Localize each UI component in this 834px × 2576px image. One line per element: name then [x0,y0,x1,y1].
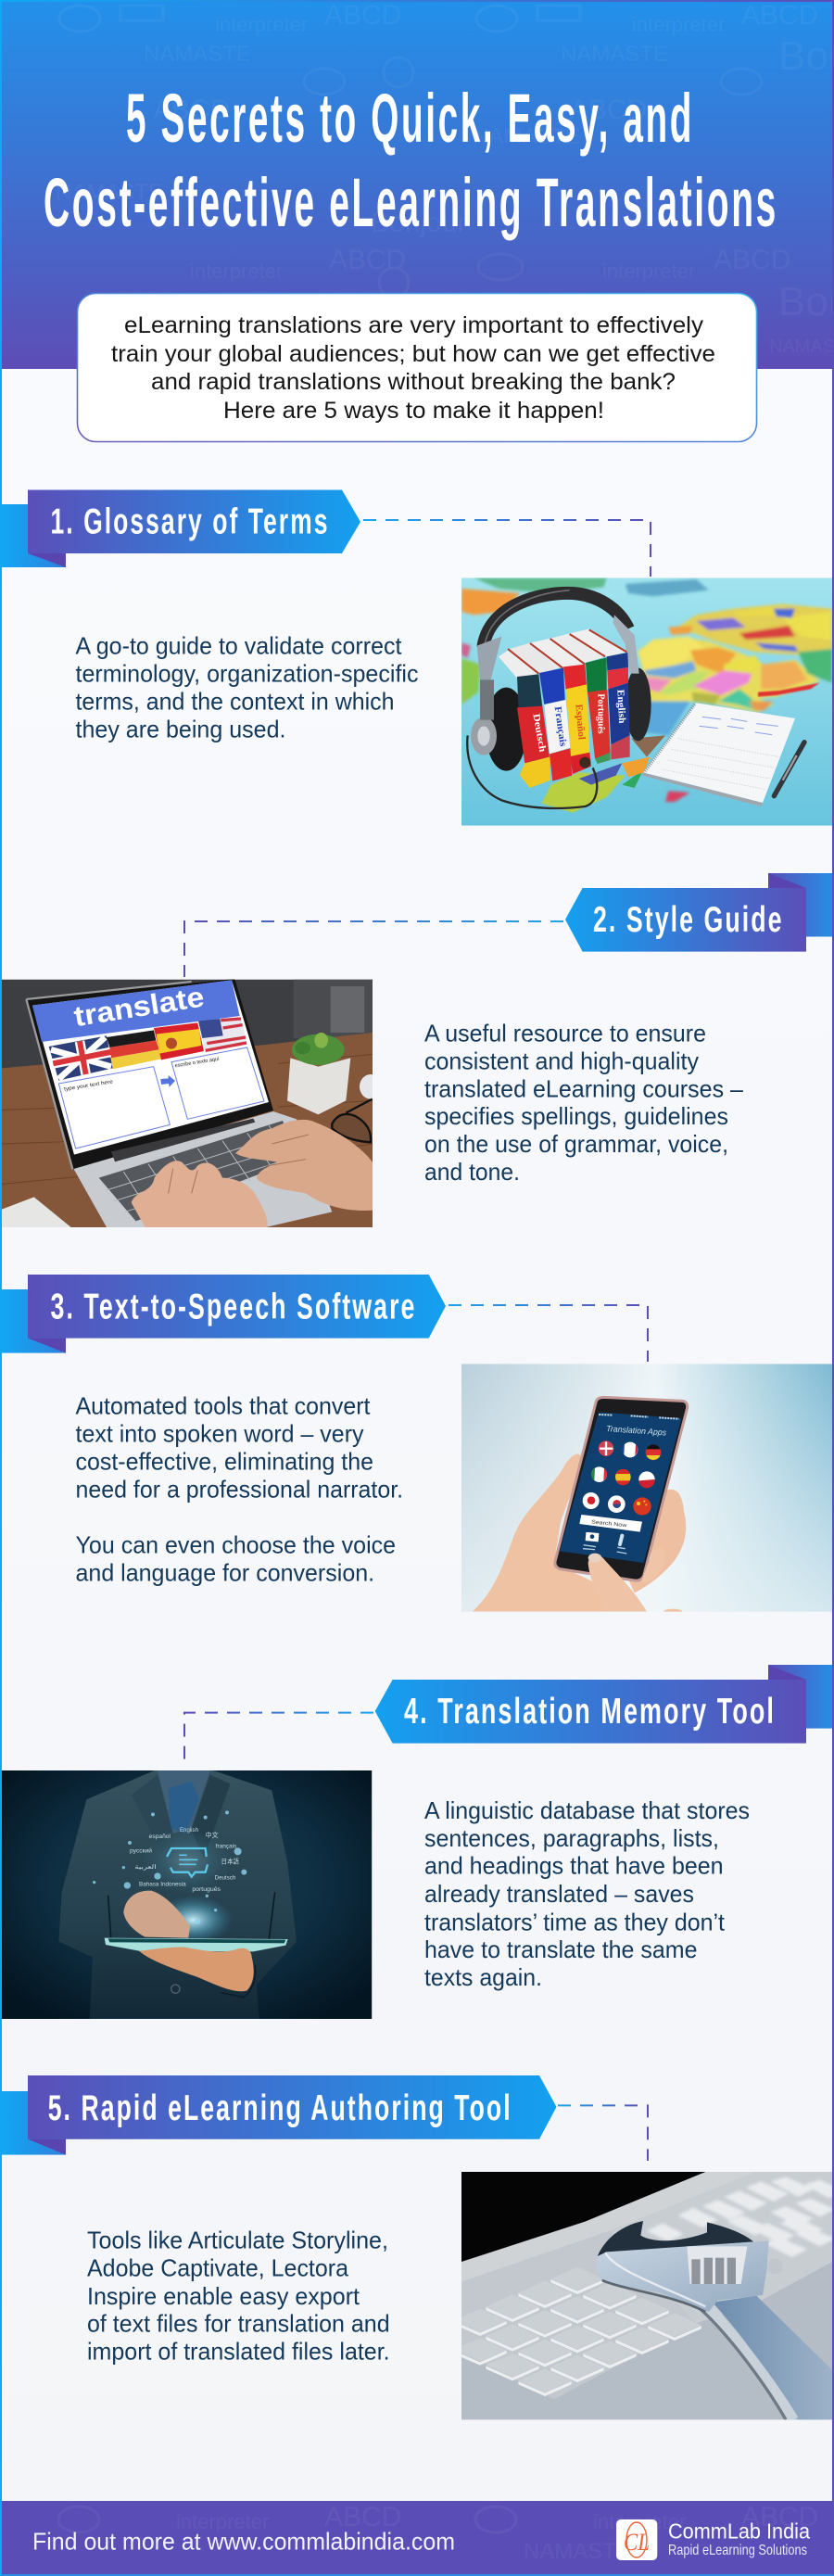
section 1 text: terms, and the context in which [76,687,395,715]
decorative language doodles: NAMASTE [524,2539,631,2564]
decorative language doodles [56,0,834,357]
section 3 image: hand holding phone: Translation Apps [606,1424,667,1438]
flag buttons [599,1440,613,1456]
section 3 text: text into spoken word – very [76,1420,363,1448]
decorative language doodles: interpreter [632,13,725,36]
title [44,80,778,241]
keyboard keys [461,2309,507,2336]
section 4 text: sentences, paragraphs, lists, [424,1824,719,1852]
section 2 heading ribbon [565,873,834,952]
intro callout: eLearning translations are very important to effectively [124,312,704,338]
section 2 text: consistent and high-quality [424,1047,699,1074]
section 4 image: businessman with translation tablet: العربية [134,1863,157,1871]
section 4 text: already translated – saves [424,1880,694,1908]
section 1 image: headphones and language books on map: Português [595,693,605,734]
section 4 text [424,1796,750,1991]
section 4 image: businessman with translation tablet: English [180,1827,198,1834]
section 3 text: need for a professional narrator. [76,1475,403,1503]
section 4 text: translators’ time as they don’t [424,1908,726,1935]
section 2 text: on the use of grammar, voice, [424,1130,728,1158]
lower hand [139,1947,254,1991]
section 5 heading ribbon: 5. Rapid eLearning Authoring Tool [48,2088,512,2128]
decorative language doodles [58,2502,818,2564]
section 2 text: specifies spellings, guidelines [424,1102,728,1130]
decorative language doodles: ABCD [570,95,647,125]
section 2 image: laptop translate page: type your text here [64,1079,113,1093]
thumb and fingers [588,1555,647,1612]
section 2 image: laptop translate page: translate [71,982,207,1033]
section 3 text: You can even choose the voice [76,1531,396,1559]
section 1 image: headphones and language books on map: English [614,690,626,724]
decorative language doodles: NAMAS [769,336,834,357]
logo wordmark [668,2519,810,2558]
cord [467,735,597,808]
section 2 image: laptop translate page [2,979,382,1227]
decorative language doodles: ABCD [153,95,230,125]
section 3 image: hand holding phone [461,1364,832,1614]
blurred keys upper right [647,2176,834,2257]
decorative language doodles: interpreter [190,260,283,283]
notebook corner [2,1197,71,1227]
section 1 text: terminology, organization-specific [76,660,419,688]
intro callout [78,293,756,441]
section 4 text: texts again. [424,1963,542,1991]
header band [0,0,834,369]
intro callout: train your global audiences; but how can we get effective [111,341,715,367]
section 4 image: businessman with translation tablet: русский [130,1847,152,1855]
arrow: section 3 connector [449,1305,648,1362]
decorative language doodles: ABCD [741,2502,818,2532]
section 1 text: A go-to guide to validate correct [76,632,402,660]
section 1 image: headphones and language books on map [461,577,832,826]
section 1 heading ribbon: 1. Glossary of Terms [50,502,330,541]
section 5 text: import of translated files later. [87,2338,390,2366]
section 5 text: Adobe Captivate, Lectora [87,2254,349,2282]
section 2 text [424,1020,744,1186]
section 5 text: Inspire enable easy export [87,2282,360,2310]
laptop base [73,1111,332,1227]
icon: CommLab India logo: CL [624,2529,650,2556]
section 4 image: businessman with translation tablet: Deutsch [215,1874,236,1881]
section 4 image: businessman with translation tablet: 中文 [206,1831,219,1839]
decorative language doodles: interpreter [602,260,695,283]
section 4 text: A linguistic database that stores [424,1796,750,1824]
hand back [473,1453,606,1611]
decorative language doodles: NAMASTE [473,124,580,149]
section 4 image: businessman with translation tablet: 日本語 [221,1858,239,1866]
plant [287,1058,350,1114]
arrow: section 2 connector [184,921,563,977]
right ear cup [626,668,651,741]
section 4 heading ribbon [375,1665,834,1744]
decorative language doodles: NAMASTE [144,42,251,67]
translation icon [167,1848,208,1877]
footer link text: Find out more at www.commlabindia.com [32,2528,455,2556]
section 3 text: Automated tools that convert [76,1392,371,1420]
decorative language doodles: ABCD [329,245,406,275]
section 5 text: of text files for translation and [87,2310,390,2338]
section 3 text [76,1392,403,1587]
hologram glow [171,1897,230,1939]
section 4 image: businessman with translation tablet [2,1770,372,2019]
decorative language doodles: NAMASTE [56,180,163,205]
section 3 text: cost-effective, eliminating the [76,1448,373,1476]
decorative language doodles: interpreter [593,2510,686,2533]
section 1 image: headphones and language books on map: Deutsch [530,713,547,753]
decorative language doodles: NAMASTE [561,42,668,67]
section 3 heading ribbon: 3. Text-to-Speech Software [50,1288,417,1327]
land masses [639,637,820,712]
decorative language doodles: ABCD [714,245,790,275]
laptop screen [26,979,273,1169]
section 4 image: businessman with translation tablet: español [149,1834,171,1840]
section 2 image: laptop translate page: escribe o texto aquí [174,1057,220,1069]
section 2 text: A useful resource to ensure [424,1020,706,1047]
hands [132,1161,268,1227]
decorative language doodles: interpreter [176,2510,269,2533]
wrench [598,2221,753,2256]
decorative language doodles: ABCD [324,2502,401,2532]
arrow: section 5 connector [558,2105,648,2161]
section 5 image: wrench on keyboard [453,2172,834,2419]
section 5 text: Tools like Articulate Storyline, [87,2227,388,2254]
section 2 text: translated eLearning courses – [424,1074,744,1102]
section 5 heading ribbon [0,2075,556,2155]
section 3 image: hand holding phone: Search Now [591,1519,628,1529]
icon: CommLab India logo [616,2519,657,2560]
section 4 image: businessman with translation tablet: português [192,1886,221,1893]
section 4 text: have to translate the same [424,1935,697,1963]
phone [555,1397,688,1580]
decorative language doodles: ABCD [741,0,818,31]
glasses [332,1099,373,1142]
section 3 text: and language for conversion. [76,1559,374,1587]
section 1 image: headphones and language books on map: Español [573,704,587,740]
left ear cup [489,688,524,771]
section 1 text [76,632,419,742]
section 4 image: businessman with translation tablet: français [216,1843,237,1849]
intro callout: and rapid translations without breaking the bank? [151,369,676,395]
tablet [105,1938,288,1951]
intro callout: Here are 5 ways to make it happen! [223,398,604,424]
section 4 text: and headings that have been [424,1852,724,1880]
flags [49,1035,113,1081]
decorative language doodles: Bonjour [371,208,466,238]
section 3 heading ribbon [0,1275,446,1353]
section 1 text: they are being used. [76,715,285,742]
arrow: section 1 connector [363,520,651,577]
section 4 image: businessman with translation tablet: Bahasa Indonesia [139,1882,186,1888]
section 1 heading ribbon [0,489,360,567]
section 1 image: headphones and language books on map: Français [552,706,568,747]
decorative language doodles: interpreter [215,13,308,36]
upper hand [123,1891,190,1938]
footer band [0,2501,834,2576]
section 5 text [87,2227,390,2366]
decorative language doodles: ABCD [324,0,401,31]
arrow: section 4 connector [184,1713,373,1759]
notebook [642,772,763,806]
books [499,651,538,679]
input boxes [58,1067,170,1148]
section 2 text: and tone. [424,1158,520,1186]
logo wordmark: CommLab India [668,2519,810,2544]
